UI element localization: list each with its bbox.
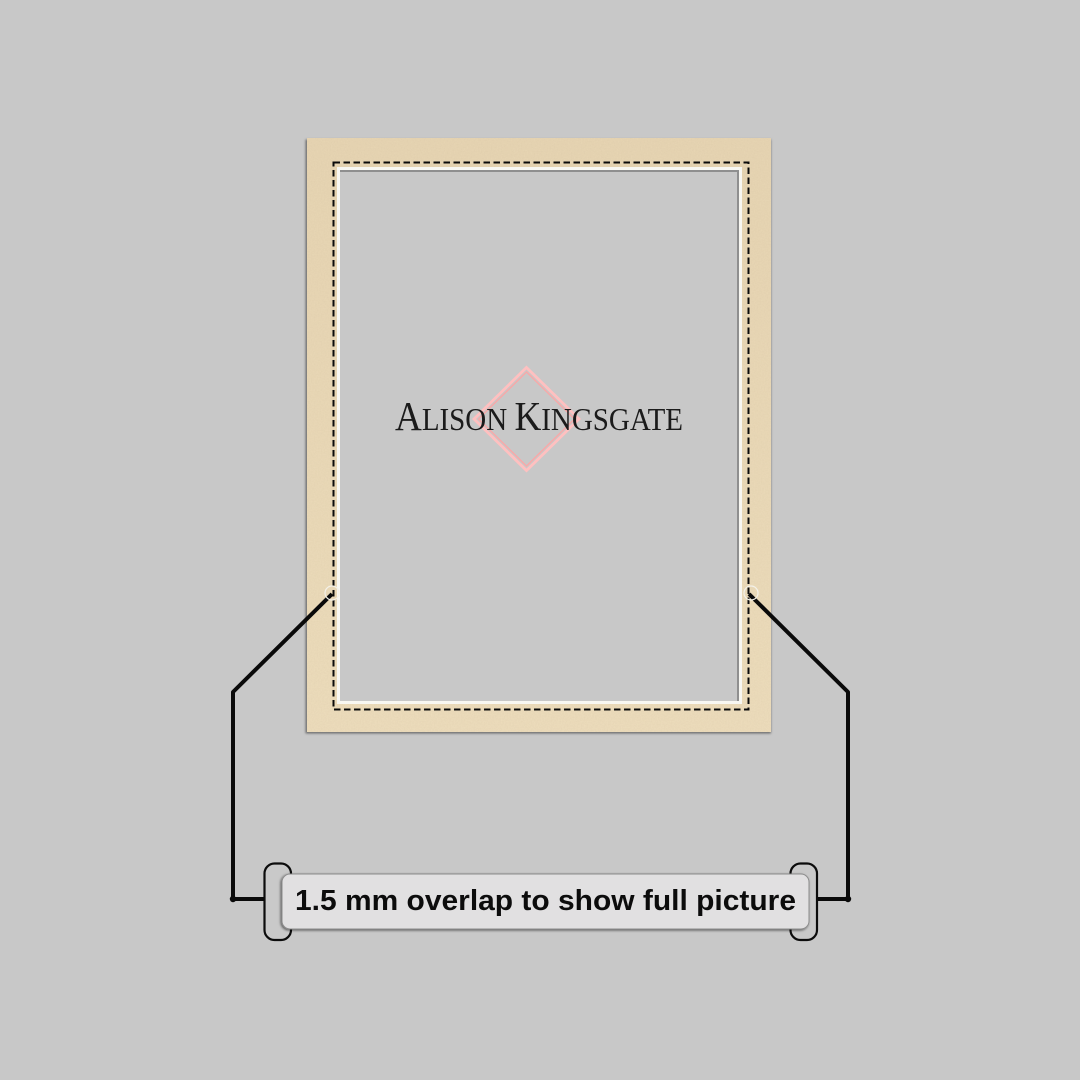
frame shadow xyxy=(306,140,771,734)
window bevel xyxy=(337,167,742,704)
right leader arrow xyxy=(744,586,851,902)
right marker circle xyxy=(744,586,758,600)
callout label xyxy=(264,864,817,940)
label text: 1.5 mm overlap to show full picture xyxy=(295,885,796,917)
label pill xyxy=(282,874,809,929)
logo wordmark: ALISON KINGSGATE xyxy=(395,393,683,439)
panel: mount frame xyxy=(306,138,771,734)
left leader arrow xyxy=(230,586,339,902)
window opening xyxy=(340,170,739,701)
logo: Alison Kingsgate xyxy=(395,368,683,470)
window inner shadow xyxy=(340,170,739,701)
dashed overlap line xyxy=(334,162,748,710)
left bracket xyxy=(264,864,291,940)
left marker circle xyxy=(325,586,339,600)
mount board xyxy=(307,138,771,732)
right bracket xyxy=(790,864,817,940)
logo diamond xyxy=(474,368,579,470)
